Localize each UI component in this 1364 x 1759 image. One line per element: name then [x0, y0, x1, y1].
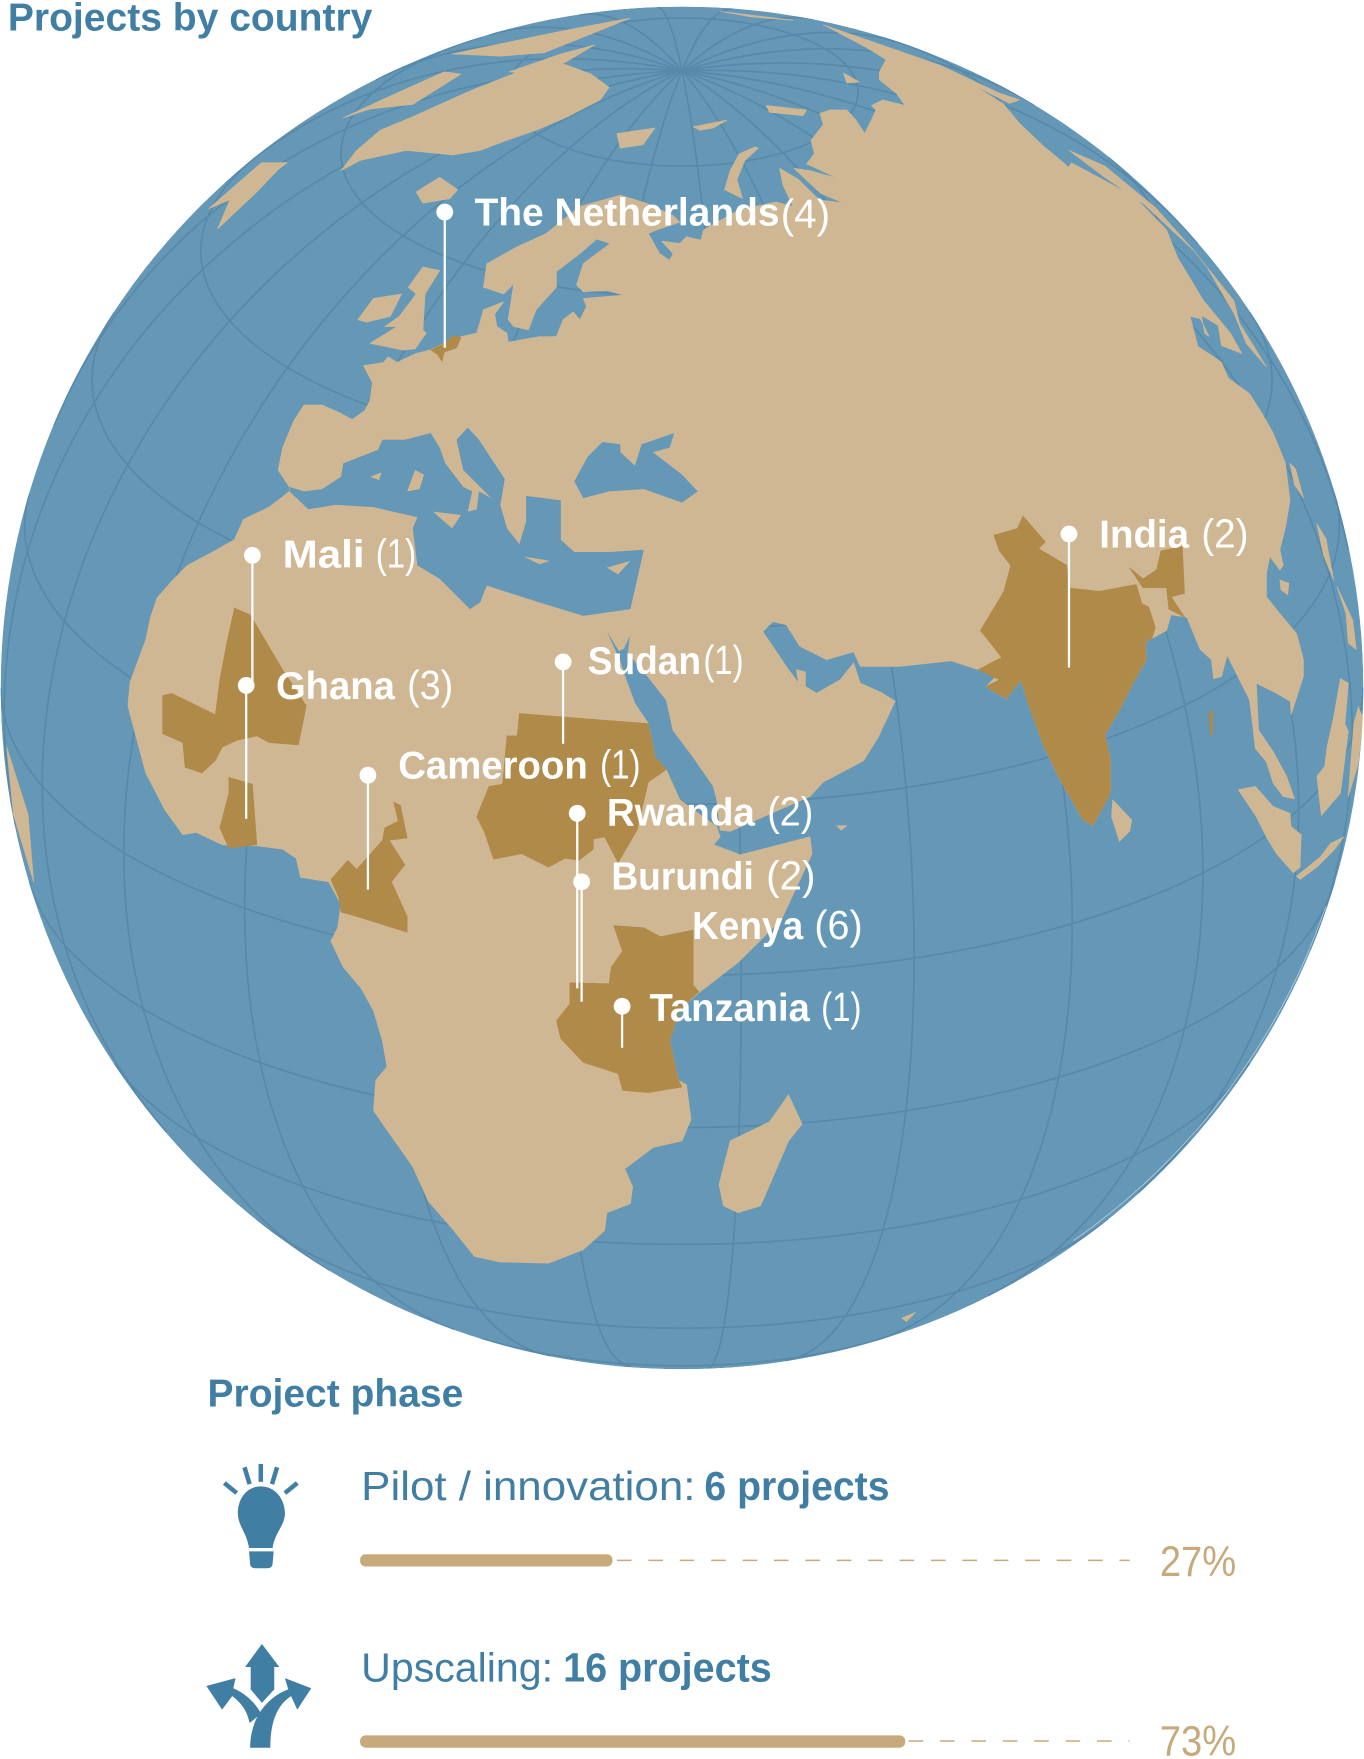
country: India north-east — [1130, 546, 1185, 617]
icon: light bulb — [224, 1464, 297, 1568]
country: Cameroon — [331, 802, 407, 932]
country: Ghana — [220, 777, 257, 848]
label: Sudan: (1) — [703, 637, 744, 683]
pilot text: Pilot / innovation: — [361, 1463, 695, 1509]
label: Ghana — [238, 662, 453, 819]
label: Burundi — [573, 853, 815, 1002]
country: Mali — [163, 608, 306, 773]
label: The Netherlands: (4) — [781, 191, 830, 237]
upscaling text: Upscaling: — [361, 1645, 553, 1691]
pilot text: 6 projects — [704, 1463, 890, 1509]
label: The Netherlands: The Netherlands — [474, 191, 780, 235]
panel: pilot / innovation — [224, 1463, 1236, 1586]
country: Kenya and Tanzania — [556, 925, 699, 1093]
limb highlight — [1073, 906, 1326, 1241]
value: 27%: 27% — [1160, 1538, 1236, 1586]
label: Burundi: (2) — [766, 853, 815, 899]
label: Mali: (1) — [376, 531, 416, 577]
heading: project phase: Project phase — [208, 1372, 463, 1416]
label: Kenya — [692, 902, 863, 948]
label: India — [1061, 510, 1248, 667]
pilot text — [361, 1463, 890, 1509]
label: India: India — [1099, 512, 1190, 556]
inland seas — [289, 427, 698, 616]
label: Mali — [244, 531, 416, 687]
label: Rwanda: Rwanda — [607, 791, 756, 835]
label: Cameroon: Cameroon — [398, 744, 588, 788]
upscaling text: 16 projects — [563, 1645, 772, 1691]
label: Kenya: (6) — [814, 902, 863, 948]
progress bar: 27% — [360, 1554, 612, 1567]
label: India: (2) — [1201, 510, 1248, 556]
label: Tanzania: (1) — [821, 984, 861, 1030]
label: Sudan: Sudan — [588, 639, 701, 683]
Mediterranean islands — [370, 470, 630, 574]
land masses — [7, 11, 1363, 1321]
panel: globe map — [1, 7, 1363, 1369]
label: Ghana: (3) — [407, 662, 453, 708]
panel: upscaling — [206, 1644, 1236, 1759]
globe ocean — [1, 7, 1363, 1369]
label: The Netherlands — [436, 191, 830, 348]
country: Sudan — [477, 713, 666, 867]
label: Burundi: Burundi — [611, 855, 754, 899]
label: Mali: Mali — [283, 533, 365, 577]
icon: branching arrows — [206, 1644, 311, 1748]
label: Cameroon — [360, 742, 640, 890]
label: Kenya: Kenya — [692, 904, 804, 948]
country: India — [978, 516, 1155, 826]
country: Andaman islands — [1209, 711, 1213, 735]
label: Rwanda: (2) — [767, 789, 813, 835]
label: Rwanda — [569, 789, 813, 988]
upscaling text — [361, 1645, 772, 1691]
label: Tanzania: Tanzania — [649, 986, 811, 1030]
label: Ghana: Ghana — [276, 664, 396, 708]
label: Sudan — [555, 637, 744, 744]
country: Netherlands — [431, 335, 461, 361]
progress bar: 73% — [360, 1735, 905, 1748]
label: Cameroon: (1) — [600, 742, 640, 788]
label: Tanzania — [614, 984, 861, 1048]
highlighted countries — [163, 335, 1213, 1093]
